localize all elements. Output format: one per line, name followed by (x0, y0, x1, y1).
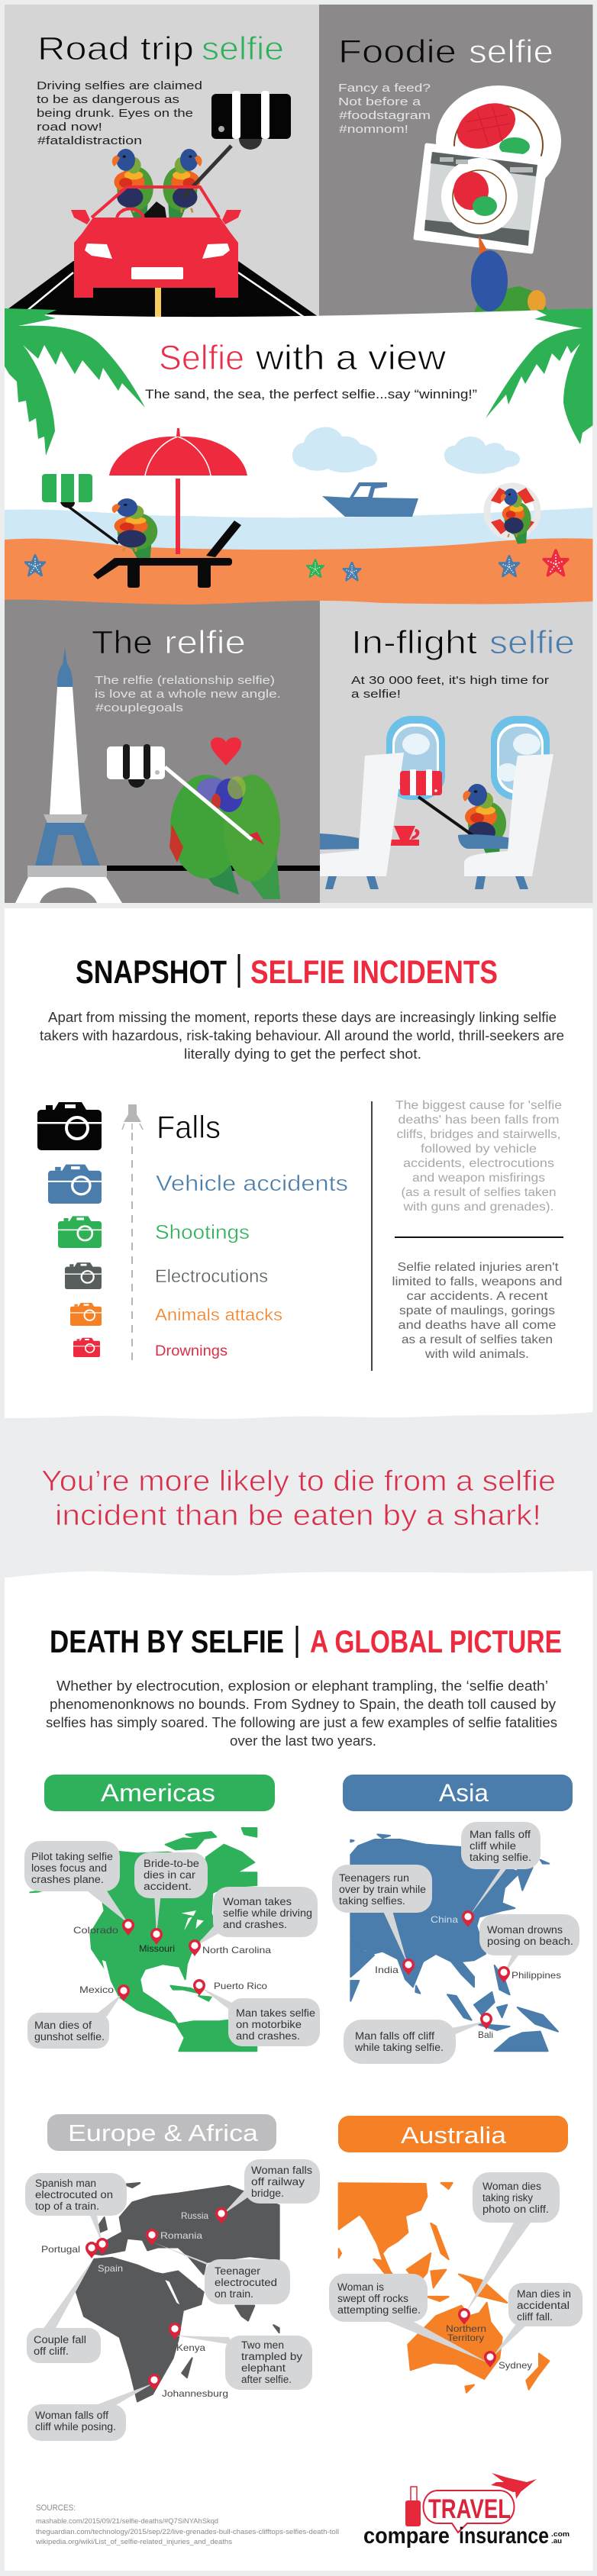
panel: asia (332, 1775, 579, 2064)
callout: woman falls railway: bridge. (251, 2188, 284, 2199)
seat right (464, 754, 553, 876)
map: north america (30, 1828, 257, 2051)
text: in-flight description: a selfie! (351, 688, 401, 701)
text: biggest cause: (as a result of selfies taken (402, 1186, 556, 1199)
text: biggest cause: accidents, electrocutions (403, 1157, 554, 1170)
callout: two men: elephant (241, 2362, 286, 2374)
text: global intro: phenomenonknows no bounds. From Sydney to Spain, the death toll caused by (50, 1697, 556, 1712)
callout: woman dies (466, 2172, 560, 2313)
icon: camera electrocutions (65, 1262, 102, 1289)
map labels: europe and africa: Kenya (176, 2342, 205, 2353)
callout: cliff fall sydney: accidental (517, 2300, 570, 2311)
pill: australia (338, 2116, 568, 2152)
text: insurance: insurance (459, 2523, 549, 2549)
callout: two men: Two men (241, 2339, 284, 2351)
text: fancy a feed: #nomnom! (339, 123, 408, 136)
text: intro paragraph: Apart from missing the moment, reports these days are increasingly linking selfie (48, 1010, 557, 1025)
callout: swept off rocks: swept off rocks (337, 2293, 408, 2304)
heading: the relfie: relfie (164, 624, 246, 661)
icon: camera falls (37, 1102, 102, 1150)
pill: americas: Americas (101, 1779, 215, 1807)
icon: starfish blue (25, 555, 45, 575)
heading: selfie with a view (160, 345, 446, 369)
callout: motorbike: and crashes. (236, 2030, 300, 2042)
callout: bride: Bride-to-be (144, 1858, 199, 1869)
icon: plane window right (491, 716, 550, 800)
pill: asia (343, 1775, 573, 1811)
sand (5, 538, 593, 605)
icon: suitcase (405, 2487, 421, 2526)
map labels: europe and africa (41, 2210, 228, 2399)
label: animals attacks: Animals attacks (155, 1305, 282, 1324)
text: driving selfies: road now! (37, 121, 102, 134)
icon: scale arrow with lamp (122, 1104, 143, 1361)
callout: motorbike: on motorbike (236, 2019, 302, 2030)
callout: two men (175, 2336, 312, 2390)
callout: woman dies: photo on cliff. (482, 2204, 549, 2215)
heading: in-flight selfie: selfie (489, 624, 575, 661)
callout: couple fall: Couple fall (34, 2334, 86, 2345)
logo: travel compare insurance (363, 2473, 570, 2549)
panel: snapshot selfie incidents (5, 908, 592, 1419)
callout: woman falls posing: Woman falls off (35, 2410, 108, 2421)
callout: shark comparison: incident than be eaten by a shark! (55, 1500, 541, 1532)
map labels: europe and africa: Portugal (41, 2244, 80, 2255)
text: biggest cause (395, 1099, 562, 1214)
text: global intro: selfies has simply soared. The following are just a few examples of selfie fatalities (46, 1715, 557, 1730)
map labels: americas: Colorado (73, 1925, 118, 1936)
callout: teenager electrocuted: on train. (215, 2288, 253, 2300)
pill: australia: Australia (401, 2122, 507, 2149)
map labels: asia (375, 1914, 561, 2040)
pill: americas (44, 1775, 275, 1811)
heading: the relfie: The (92, 624, 153, 661)
road (5, 261, 319, 321)
icon: starfish blue middle (344, 563, 360, 580)
callout: spanish man: electrocuted on (35, 2189, 113, 2200)
callout: gunshot: gunshot selfie. (34, 2031, 105, 2042)
map pins: asia (402, 1910, 510, 2030)
callout: man falls bali: Man falls off cliff (355, 2030, 434, 2042)
wire (107, 866, 321, 871)
map labels: asia: Bali (478, 2030, 493, 2040)
callout: teenagers india: Teenagers run (339, 1872, 409, 1884)
map: europe and africa (76, 2183, 279, 2401)
icon: selfie stick and phone (183, 91, 291, 197)
icon: heart (211, 737, 241, 766)
callout: cliff fall sydney (492, 2283, 582, 2357)
callout: bride: dies in car (144, 1869, 196, 1881)
map labels: asia: India (375, 1965, 399, 1975)
label: shootings: Shootings (155, 1220, 250, 1243)
label: falls: Falls (157, 1109, 221, 1145)
map labels: europe and africa: Johannesburg (162, 2388, 228, 2399)
callout: swept off rocks: Woman is (337, 2281, 384, 2293)
callout: pilot (24, 1841, 128, 1923)
callout: teenager electrocuted (153, 2242, 290, 2304)
text: intro paragraph: takers with hazardous, risk-taking behaviour. All around the world, thrill-seekers are (40, 1028, 564, 1043)
seat legs (325, 876, 528, 889)
sources (35, 2503, 339, 2546)
icon: camera drownings (73, 1338, 100, 1357)
text: fancy a feed: #foodstagram (339, 109, 431, 122)
map: asia (350, 1834, 558, 2051)
callout: two men: trampled by (241, 2351, 302, 2362)
heading: foodie selfie (338, 34, 553, 70)
sources: mashable.com/2015/09/21/selfie-deaths/#Q7SiNYAhSkqd (36, 2517, 218, 2526)
text: intro paragraph: literally dying to get the perfect shot. (184, 1046, 421, 1062)
icon: starfish blue right (499, 556, 519, 576)
text: fancy a feed: Fancy a feed? (338, 82, 431, 95)
text: driving selfies: to be as dangerous as (37, 93, 179, 106)
callout: swept off rocks: attempting selfie. (337, 2304, 421, 2316)
pill: europe and africa: Europe & Africa (68, 2120, 259, 2146)
map: australia (339, 2183, 549, 2393)
text: selfie related injuries: spate of maulings, gorings (399, 1304, 555, 1317)
callout: gunshot (27, 1994, 122, 2049)
panel: europe and africa (25, 2114, 320, 2441)
icon: tablet showing food photo (415, 145, 547, 252)
callout: spanish man: Spanish man (35, 2178, 96, 2189)
callout: cliff fall sydney: Man dies in (517, 2288, 571, 2300)
callout: pilot: crashes plane. (31, 1874, 104, 1885)
text: compare: compare (363, 2523, 450, 2549)
text: biggest cause: followed by vehicle (421, 1143, 537, 1156)
pill: europe and africa (47, 2114, 276, 2151)
text: in-flight description: At 30 000 feet, it's high time for (351, 674, 549, 687)
callout: woman falls posing: cliff while posing. (35, 2421, 116, 2433)
callout: bride: accident. (144, 1881, 192, 1892)
callout: motorbike (201, 1988, 320, 2046)
parrot from behind (471, 235, 551, 319)
icon: cloud left (292, 427, 377, 472)
text: selfie related injuries: limited to falls, weapons and (392, 1275, 562, 1288)
parrot in lounger (112, 498, 157, 559)
icon: lifebuoy with parrot (487, 486, 537, 544)
text: driving selfies (37, 79, 202, 147)
icon: camera shootings (58, 1216, 102, 1248)
heading: snapshot (76, 954, 498, 991)
text: driving selfies: Driving selfies are claimed (37, 79, 202, 92)
icon: eiffel tower (15, 647, 122, 903)
text: global intro: over the last two years. (230, 1733, 376, 1749)
text: global intro: Whether by electrocution, explosion or elephant trampling, the ‘selfie death’ (56, 1678, 548, 1694)
heading: road trip selfie: selfie (202, 31, 284, 67)
label: electrocutions: Electrocutions (155, 1266, 268, 1287)
beach sky (5, 308, 592, 517)
subheading: The sand, the sea, the perfect selfie...say “winning!” (145, 387, 477, 401)
text: selfie related injuries: as a result of selfies taken (402, 1333, 553, 1346)
parrot on plane (463, 784, 506, 856)
seat left (320, 753, 404, 876)
map labels: americas: Mexico (79, 1984, 114, 1995)
callout: pilot: Pilot taking selfie (31, 1851, 113, 1862)
map labels: europe and africa: Romania (160, 2230, 202, 2241)
icon: sun lounger (93, 521, 241, 588)
sources: SOURCES: (36, 2503, 76, 2513)
callout: woman dies: taking risky (482, 2192, 533, 2204)
callout: bride (134, 1852, 208, 1935)
callout: shark comparison: You’re more likely to die from a selfie (41, 1465, 556, 1498)
map labels: asia: China (431, 1914, 458, 1925)
text: dot com dot au: .au (551, 2537, 562, 2545)
text: selfie related injuries (392, 1261, 562, 1361)
callout: man falls china (461, 1822, 541, 1916)
icon: plane (491, 2473, 537, 2499)
heading: in-flight selfie: In-flight (351, 624, 477, 661)
heading: road trip selfie (37, 31, 284, 67)
text: in-flight description (351, 674, 549, 701)
palm tree left (5, 308, 145, 456)
heading: foodie selfie: selfie (469, 34, 553, 70)
callout: pilot: loses focus and (31, 1862, 107, 1874)
heading: snapshot: SELFIE INCIDENTS (250, 954, 498, 991)
panel: death by selfie (5, 1571, 592, 2571)
map labels: americas: Missouri (139, 1943, 175, 1954)
callout: man falls china: taking selfie. (470, 1852, 531, 1863)
text: dot com dot au (551, 2530, 570, 2545)
sea (5, 508, 592, 550)
heading: snapshot: SNAPSHOT (76, 954, 227, 991)
heading: death by selfie (50, 1623, 562, 1659)
callout: gunshot: Man dies of (34, 2020, 92, 2031)
map labels: americas: North Carolina (202, 1945, 271, 1955)
callout: spanish man (25, 2173, 127, 2244)
text: biggest cause: with guns and grenades). (402, 1201, 554, 1214)
callout: spanish man: top of a train. (35, 2200, 99, 2212)
heading: the relfie (92, 624, 246, 661)
text: biggest cause: The biggest cause for 'selfie (395, 1099, 562, 1112)
callout: woman driving (195, 1887, 318, 1946)
icon: selfie stick with phone (107, 744, 264, 845)
callout: teenagers india (332, 1865, 432, 1965)
map pins: europe and africa (86, 2207, 228, 2391)
icon: umbrella (109, 428, 247, 554)
panel: australia (329, 2116, 582, 2393)
text: relfie description: is love at a whole new angle. (95, 688, 281, 701)
map labels: asia: Philippines (511, 1970, 561, 1981)
icon: starfish green (307, 559, 324, 577)
text: biggest cause: cliffs, bridges and stairwells, (397, 1128, 560, 1141)
icon: boat (322, 482, 418, 517)
car (71, 187, 241, 298)
love parrots (169, 775, 280, 899)
text: biggest cause: deaths' has been falls from (399, 1114, 559, 1127)
callout: motorbike: Man takes selfie (236, 2007, 315, 2019)
heading: foodie selfie: Foodie (338, 34, 457, 70)
map labels: americas: Puerto Rico (214, 1981, 267, 1991)
text: relfie description: The relfie (relationship selfie) (95, 674, 275, 687)
icon: camera vehicle accidents (48, 1165, 102, 1204)
callout: woman driving: Woman takes (223, 1896, 292, 1907)
callout: teenager electrocuted: Teenager (215, 2265, 261, 2277)
callout: woman falls railway: off railway (251, 2176, 305, 2188)
callout: man falls bali (344, 2020, 486, 2064)
callout: man falls bali: while taking selfie. (354, 2042, 444, 2053)
map labels: australia: Northern (446, 2323, 486, 2334)
label: drownings: Drownings (155, 1343, 228, 1359)
map labels: australia (446, 2323, 532, 2371)
icon: red phone on stick (400, 769, 473, 836)
heading: death by selfie: DEATH BY SELFIE (50, 1623, 284, 1659)
callout: woman falls railway: Woman falls (251, 2165, 312, 2176)
parrots in car (112, 149, 202, 221)
text: selfie related injuries: car accidents. A recent (406, 1290, 548, 1303)
palm tree right (486, 308, 593, 444)
heading: in-flight selfie (351, 624, 575, 661)
panel: road trip selfie (5, 5, 319, 321)
icon: coffee cup (388, 826, 419, 846)
callout: shark comparison (41, 1465, 556, 1532)
sources: theguardian.com/technology/2015/sep/22/live-grenades-bull-chases-clifftops-selfies-death-toll (36, 2528, 339, 2536)
text: driving selfies: being drunk. Eyes on the (37, 107, 193, 120)
callout: man falls china: Man falls off (470, 1829, 531, 1840)
heading: selfie with a view: Selfie (159, 338, 244, 377)
callout: cliff fall sydney: cliff fall. (517, 2311, 553, 2323)
icon: plate of food (436, 85, 561, 197)
map pins: americas (118, 1919, 205, 2001)
callout: couple fall (27, 2259, 101, 2363)
icon: camera animal attacks (70, 1303, 102, 1326)
panel: americas (24, 1775, 320, 2051)
tray left (320, 833, 359, 850)
callout: two men: after selfie. (241, 2374, 292, 2385)
sources: wikipedia.org/wiki/List_of_selfie-related_injuries_and_deaths (35, 2538, 232, 2546)
callout: woman falls railway (222, 2159, 320, 2215)
callout: teenager electrocuted: electrocuted (215, 2277, 277, 2288)
map labels: australia: Sydney (499, 2360, 532, 2371)
panel: in-flight selfie (320, 588, 592, 903)
panel: selfie with a view (5, 308, 593, 605)
callout: swept off rocks (329, 2274, 489, 2363)
text: relfie description: #couplegoals (95, 701, 183, 714)
pill: asia: Asia (439, 1779, 489, 1807)
heading: selfie with a view: with a view (255, 338, 447, 377)
callout: man falls china: cliff while (470, 1840, 516, 1852)
icon: plane window left (386, 716, 445, 800)
text: intro paragraph (40, 1010, 564, 1062)
callout: woman drowns: Woman drowns (487, 1924, 563, 1936)
map labels: americas (73, 1925, 271, 1995)
callout: woman driving: selfie while driving (223, 1907, 312, 1919)
map labels: australia: Territory (447, 2333, 484, 2343)
text: fancy a feed: Not before a (338, 95, 421, 108)
text: driving selfies: #fataldistraction (37, 134, 142, 147)
text: travel: TRAVEL (428, 2494, 511, 2524)
callout: couple fall: off cliff. (34, 2345, 69, 2357)
text: relfie description (95, 674, 281, 714)
tray right (458, 834, 510, 849)
text: selfie related injuries: with wild animals. (424, 1348, 529, 1361)
speech bubble outline (423, 2491, 515, 2532)
icon: starfish red (544, 550, 568, 575)
callout: woman falls posing (27, 2383, 154, 2441)
text: dot com dot au: .com (551, 2530, 570, 2538)
panel: foodie selfie (319, 5, 592, 319)
callout: woman drowns (479, 1914, 579, 1975)
icon: green phone on stick (42, 472, 118, 543)
map pins: australia (458, 2308, 496, 2368)
panel: the relfie (5, 588, 321, 903)
icon: cloud right (444, 437, 520, 474)
text: global intro (46, 1678, 557, 1749)
heading: road trip selfie: Road trip (37, 31, 194, 67)
label: vehicle accidents: Vehicle accidents (156, 1172, 348, 1196)
text: selfie related injuries: Selfie related injuries aren't (397, 1261, 559, 1274)
map labels: europe and africa: Russia (181, 2210, 208, 2221)
callout: teenagers india: over by train while (339, 1884, 426, 1895)
callout: woman driving: and crashes. (223, 1919, 287, 1930)
text: fancy a feed (338, 82, 431, 136)
map labels: europe and africa: Spain (98, 2263, 123, 2274)
callout: woman dies: Woman dies (482, 2181, 541, 2192)
text: biggest cause: and weapon misfirings (412, 1172, 545, 1185)
callout: woman drowns: posing on beach. (487, 1936, 573, 1947)
text: selfie related injuries: and deaths have all come (399, 1319, 557, 1332)
callout: teenagers india: taking selfies. (339, 1895, 405, 1907)
